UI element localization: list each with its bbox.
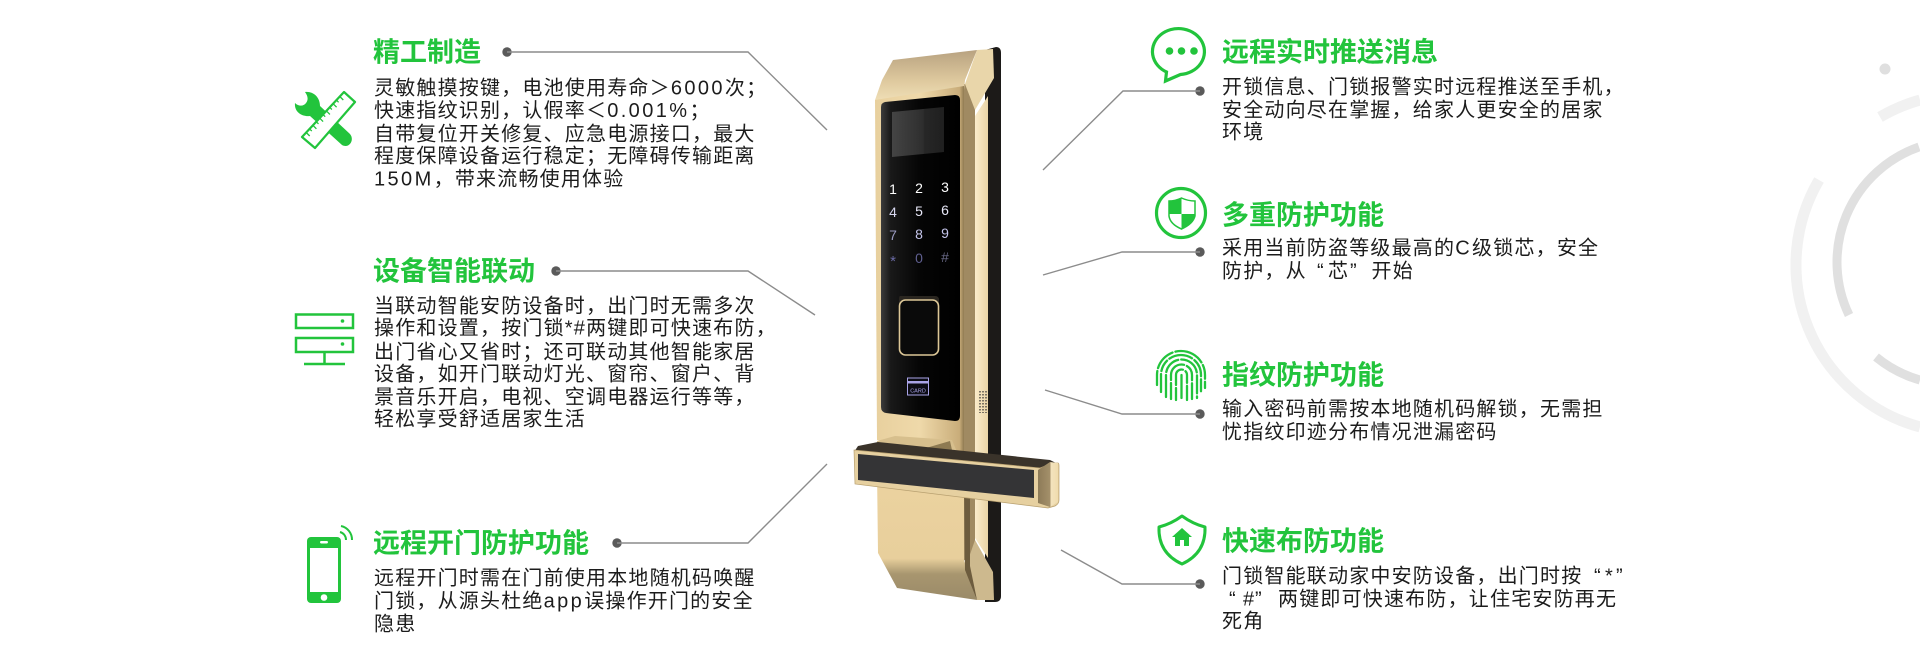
keypad digits: 3 xyxy=(941,179,949,195)
lock back plate xyxy=(985,47,1001,602)
body text: 门锁智能联动家中安防设备，出门时按 xyxy=(1222,566,1582,588)
body text: 门锁，从源头杜绝app误操作开门的安全 xyxy=(374,590,754,612)
body text: 两键即可快速布防，让住宅安防再无 xyxy=(1278,588,1617,610)
connector line xyxy=(551,266,815,315)
body text: ” xyxy=(1616,566,1624,588)
icon: wrench and ruler xyxy=(295,92,355,148)
lock lower corner xyxy=(966,540,994,600)
panel: 远程实时推送消息 xyxy=(1043,29,1625,170)
body text: 操作和设置，按门锁*#两键即可快速布防， xyxy=(374,316,777,340)
heading: 远程开门防护功能 xyxy=(373,528,589,558)
keypad digits: # xyxy=(941,249,949,265)
keypad digits: 8 xyxy=(915,226,923,242)
body text: ” xyxy=(1350,260,1358,282)
keypad digits: 4 xyxy=(889,204,897,220)
body text: 自带复位开关修复、应急电源接口，最大 xyxy=(374,122,756,146)
body text xyxy=(1222,236,1599,282)
heading: 多重防护功能 xyxy=(1222,200,1384,230)
body text: 环境 xyxy=(1222,120,1264,144)
body text: 开锁信息、门锁报警实时远程推送至手机， xyxy=(1222,76,1625,98)
speaker holes xyxy=(980,391,986,413)
background decorative arcs xyxy=(1796,64,1920,427)
touch panel xyxy=(881,95,960,421)
keypad digits xyxy=(889,179,949,270)
body text: 设备，如开门联动灯光、窗帘、窗户、背 xyxy=(374,362,756,386)
panel: 指纹防护功能 xyxy=(1045,351,1604,444)
body text xyxy=(374,566,756,636)
body text: 灵敏触摸按键，电池使用寿命＞6000次； xyxy=(374,76,767,100)
body text: 芯 xyxy=(1328,260,1349,282)
connector line xyxy=(502,47,827,130)
keypad digits: 0 xyxy=(915,250,923,266)
lock front face upper xyxy=(875,86,964,452)
icon: chat bubble xyxy=(1152,29,1204,81)
keypad digits: 7 xyxy=(889,227,897,243)
body text: 150M，带来流畅使用体验 xyxy=(374,168,624,190)
heading: 快速布防功能 xyxy=(1222,526,1384,556)
body text: 景音乐开启，电视、空调电器运行等等， xyxy=(374,386,756,408)
icon: smartphone xyxy=(307,526,352,603)
body text: 当联动智能安防设备时，出门时无需多次 xyxy=(374,294,756,318)
body text: 安全动向尽在掌握，给家人更安全的居家 xyxy=(1222,98,1604,122)
connector line xyxy=(1061,550,1205,589)
door lock product xyxy=(854,47,1059,602)
body text: 隐患 xyxy=(374,612,416,636)
keypad digits: * xyxy=(890,253,896,270)
lock top cap xyxy=(875,50,977,104)
card reader icon xyxy=(908,378,928,395)
panel: 快速布防功能 xyxy=(1061,516,1624,632)
body text: 忧指纹印迹分布情况泄漏密码 xyxy=(1222,420,1498,444)
icon: shield with house xyxy=(1159,516,1205,564)
keypad digits: 5 xyxy=(915,203,923,219)
panel: 多重防护功能 xyxy=(1043,188,1599,282)
lock side cream strip xyxy=(975,96,988,558)
heading: 精工制造 xyxy=(373,38,481,68)
connector line xyxy=(1043,86,1205,170)
body text xyxy=(1222,398,1604,444)
body text: 远程开门时需在门前使用本地随机码唤醒 xyxy=(374,566,756,590)
lock side dark strip xyxy=(964,84,975,566)
heading: 设备智能联动 xyxy=(373,256,535,286)
heading: 指纹防护功能 xyxy=(1222,360,1384,390)
body text: # xyxy=(1243,588,1255,610)
body text: 采用当前防盗等级最高的C级锁芯，安全 xyxy=(1222,236,1599,260)
body text: 防护，从 xyxy=(1222,260,1307,282)
body text: “ xyxy=(1594,566,1602,588)
body text: 死角 xyxy=(1222,610,1264,632)
body text: 出门省心又省时；还可联动其他智能家居 xyxy=(374,340,756,364)
icon: shield in circle xyxy=(1156,188,1206,238)
body text: ” xyxy=(1255,588,1263,610)
lock front face lower xyxy=(877,470,977,600)
body text: * xyxy=(1605,566,1614,588)
body text: 快速指纹识别，认假率＜0.001%； xyxy=(374,99,711,122)
connector line xyxy=(612,464,827,548)
panel: 设备智能联动 xyxy=(296,256,815,430)
keypad digits: 9 xyxy=(941,225,949,241)
body text: “ xyxy=(1317,260,1325,282)
icon: fingerprint xyxy=(1157,351,1205,400)
body text: 轻松享受舒适居家生活 xyxy=(374,408,586,430)
body text: 输入密码前需按本地随机码解锁，无需担 xyxy=(1222,398,1604,420)
body text xyxy=(374,294,777,430)
body text xyxy=(374,76,767,190)
lock upper corner xyxy=(965,49,994,110)
body text: “ xyxy=(1229,588,1237,610)
connector line xyxy=(1045,390,1205,419)
panel: 精工制造 xyxy=(295,38,827,190)
icon: server xyxy=(296,314,353,364)
display screen xyxy=(892,107,944,157)
lever handle xyxy=(854,442,1059,508)
card reader icon: CARD xyxy=(910,388,926,394)
body text xyxy=(1222,564,1624,632)
handle base xyxy=(877,436,957,452)
keypad digits: 6 xyxy=(941,202,949,218)
connector line xyxy=(1043,247,1205,275)
panel: 远程开门防护功能 xyxy=(307,464,827,636)
heading: 远程实时推送消息 xyxy=(1222,38,1438,68)
keypad digits: 1 xyxy=(889,181,897,197)
body text xyxy=(1222,76,1625,144)
keypad digits: 2 xyxy=(915,180,923,196)
body text: 开始 xyxy=(1372,260,1414,282)
body text: 程度保障设备运行稳定；无障碍传输距离 xyxy=(374,144,756,168)
fingerprint sensor xyxy=(899,296,939,355)
